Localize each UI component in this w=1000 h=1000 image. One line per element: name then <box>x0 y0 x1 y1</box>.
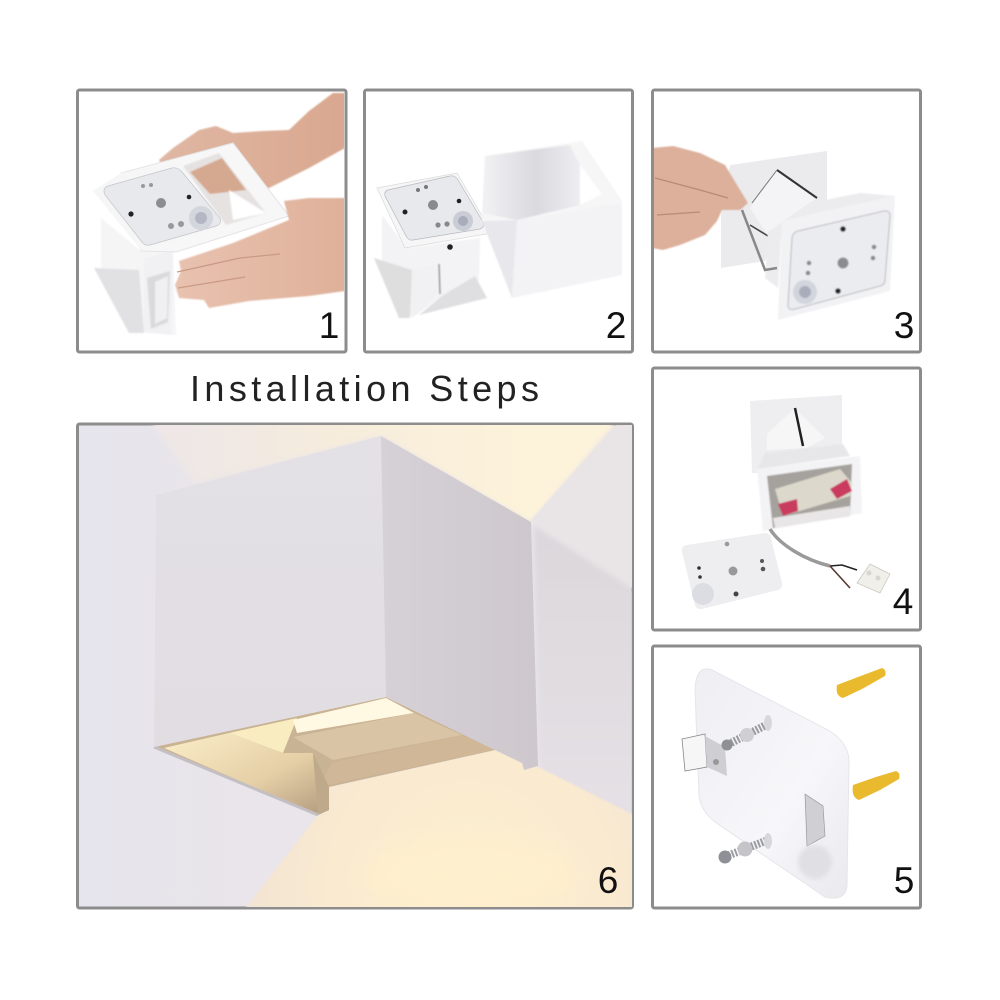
step number 6: 6 <box>598 860 618 901</box>
lower glow <box>240 750 640 915</box>
step number 4: 4 <box>893 581 913 622</box>
yellow anchor top <box>837 668 886 698</box>
square cover frame <box>121 143 289 252</box>
lamp front <box>154 436 386 747</box>
sensor dimple <box>798 845 832 879</box>
panel 6: photo of lit wall lamp <box>78 420 640 915</box>
lamp body <box>94 218 176 335</box>
cover box <box>482 141 622 298</box>
screw top <box>722 715 772 750</box>
step number 1: 1 <box>319 305 339 346</box>
lamp face plate <box>377 173 492 250</box>
lamp side <box>381 436 538 770</box>
yellow anchor bottom <box>853 771 900 800</box>
hand <box>652 146 748 250</box>
lamp face plate <box>93 163 226 250</box>
wires <box>770 529 857 588</box>
wall plate <box>750 395 842 473</box>
lamp opening <box>154 697 495 815</box>
lamp head <box>765 193 895 320</box>
bright pool <box>360 840 580 910</box>
hex key <box>742 210 777 270</box>
right wall upper <box>531 424 634 590</box>
lamp body <box>374 215 487 318</box>
screw bottom <box>718 833 772 864</box>
top glow <box>150 420 618 522</box>
removed face plate <box>682 533 782 609</box>
right shadow plate <box>534 526 634 822</box>
wall plate <box>721 151 827 268</box>
panel 5: mounting plate with screws <box>652 646 920 908</box>
diamond bracket <box>767 408 825 450</box>
terminal block <box>857 564 890 593</box>
upper hand <box>159 93 345 200</box>
clip <box>805 794 825 846</box>
heading: Installation Steps <box>190 368 543 409</box>
step number 5: 5 <box>894 860 914 901</box>
diamond bracket <box>750 170 817 236</box>
mounting plate <box>695 669 849 898</box>
panel 1: fitting the cover over the lamp body <box>78 90 346 352</box>
cover window showing fingers <box>183 153 266 225</box>
panel 2: cover removed from lamp body <box>364 90 632 352</box>
lower hand <box>175 198 345 308</box>
step number 3: 3 <box>894 305 914 346</box>
open lamp body <box>757 444 862 531</box>
metal bracket <box>682 734 727 776</box>
panel 4: open lamp with driver and wiring <box>652 368 920 630</box>
step number 2: 2 <box>606 305 626 346</box>
panel 3: hand with hex key <box>652 90 920 352</box>
